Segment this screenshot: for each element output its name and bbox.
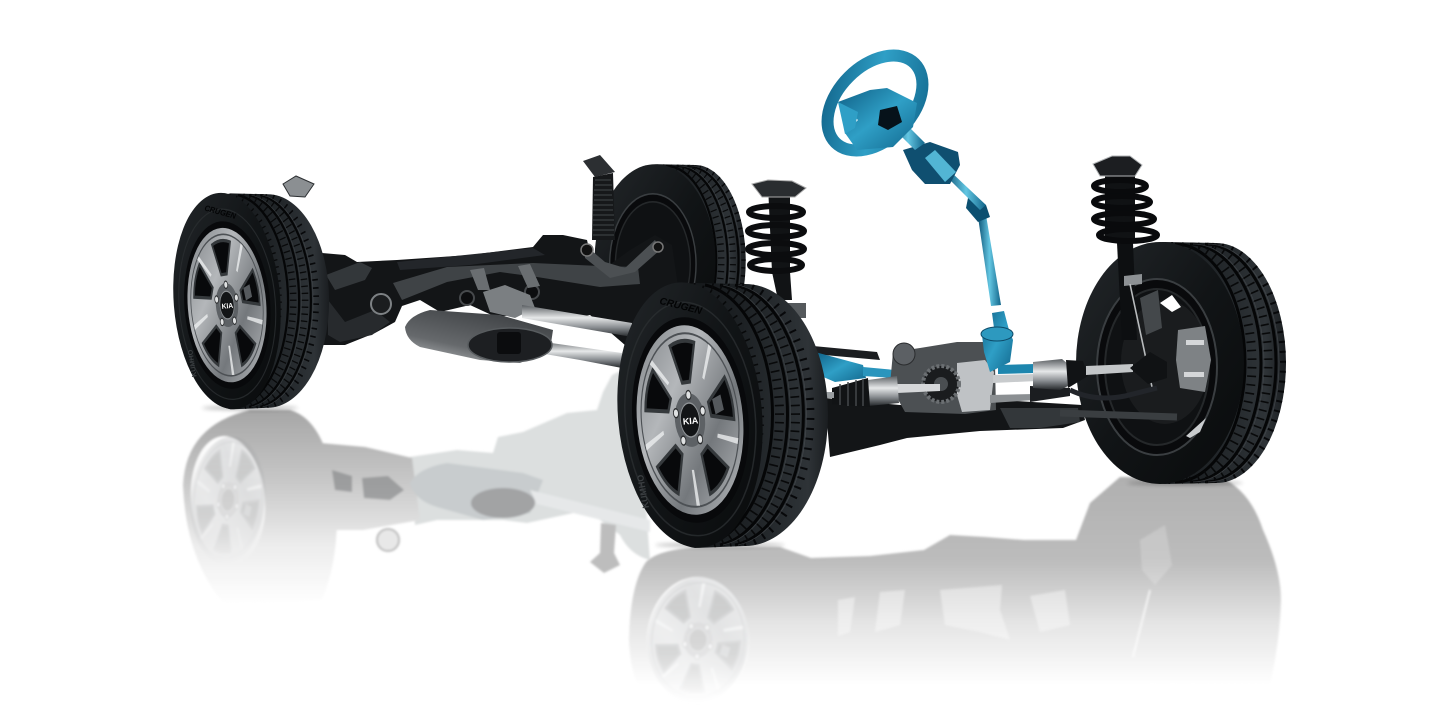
steering wheel lower spoke — [838, 102, 858, 134]
left inner shaft — [826, 392, 834, 398]
left CV boot — [832, 378, 870, 407]
left trailing arm — [326, 262, 372, 290]
steering lower joint — [982, 311, 1013, 372]
steering wheel hub — [838, 88, 917, 150]
rear subframe silhouette — [322, 235, 680, 345]
reflection: right rear chassis haze — [410, 370, 650, 560]
rear rack bar — [813, 346, 880, 360]
infographic: chassis and steering illustration — [173, 50, 1286, 692]
right control arm — [585, 240, 660, 278]
differential mount — [470, 264, 540, 290]
main cross beam — [393, 263, 640, 300]
reflection: front right details — [1133, 590, 1150, 657]
upper rail — [397, 248, 545, 270]
right subframe block — [1000, 408, 1080, 428]
blue rack shaft — [863, 367, 895, 378]
front right axle and arms — [1033, 352, 1177, 417]
front left wheel — [607, 276, 828, 554]
front subframe, axle and gearbox — [813, 342, 1085, 457]
contact shadows under tires — [202, 406, 1243, 547]
blue steering rack cylinder — [815, 352, 866, 382]
steering wheel ring — [809, 37, 941, 169]
reflection: front left rim — [648, 576, 744, 692]
reflection: muffler oval — [471, 488, 535, 518]
reflection: left chassis details — [332, 470, 404, 500]
reflection: muffler — [410, 463, 543, 520]
column housing — [903, 142, 960, 184]
middle bushings — [460, 285, 539, 305]
left bushing — [371, 294, 391, 314]
propeller shaft — [522, 305, 632, 337]
reflection: front wheels and front chassis — [629, 477, 1281, 707]
lower right link — [1030, 386, 1070, 402]
column tube — [925, 150, 956, 182]
lower bar — [990, 394, 1035, 403]
lower subframe — [825, 398, 1085, 457]
front right strut and spring — [1093, 156, 1157, 387]
gearbox dark housing — [890, 342, 996, 414]
steering lower collar — [981, 327, 1013, 341]
intermediate shaft — [946, 172, 986, 210]
front right wheel — [1076, 242, 1286, 484]
reflection: front right knuckle — [1140, 525, 1172, 585]
rear subframe and suspension — [322, 155, 680, 345]
upper bushings — [581, 242, 663, 256]
left lower arm — [328, 300, 390, 342]
steering system — [809, 37, 1013, 372]
reflection: tail pipe — [530, 490, 650, 532]
steering hub black back — [878, 106, 902, 130]
muffler hanger — [497, 332, 521, 354]
front left strut and spring — [748, 180, 806, 318]
reflection: rear left tire — [183, 410, 337, 605]
differential ring gear — [923, 366, 959, 402]
front right brake disc and hub — [1121, 290, 1211, 438]
left axle silver joint — [868, 376, 899, 406]
rear strut bellows — [583, 155, 615, 240]
exhaust and propeller shaft — [405, 305, 632, 368]
gearbox silver cover — [957, 360, 994, 412]
rear left strut mount — [283, 176, 314, 197]
reflection: left chassis band — [320, 443, 420, 560]
right shaft — [993, 374, 1037, 383]
muffler oval end — [468, 328, 552, 362]
upper shaft — [891, 117, 925, 150]
left axle shaft — [897, 384, 940, 393]
steering lower shaft — [978, 215, 1001, 306]
rear differential — [483, 285, 535, 318]
muffler body — [405, 310, 553, 363]
reflection: rear strut — [590, 523, 620, 573]
reflection: front silhouette — [629, 477, 1281, 690]
universal joint — [966, 198, 990, 222]
reflection: strut mount circle — [377, 529, 399, 551]
gearbox flange — [893, 343, 915, 365]
rear left wheel — [165, 188, 329, 414]
blue rack spring — [998, 364, 1035, 374]
tail pipe — [530, 340, 622, 368]
rear right wheel — [595, 164, 746, 358]
reflection: rear left rim — [190, 434, 266, 548]
reflection: gearbox highlights — [838, 585, 1070, 640]
reflection: rear half of chassis — [182, 371, 650, 579]
